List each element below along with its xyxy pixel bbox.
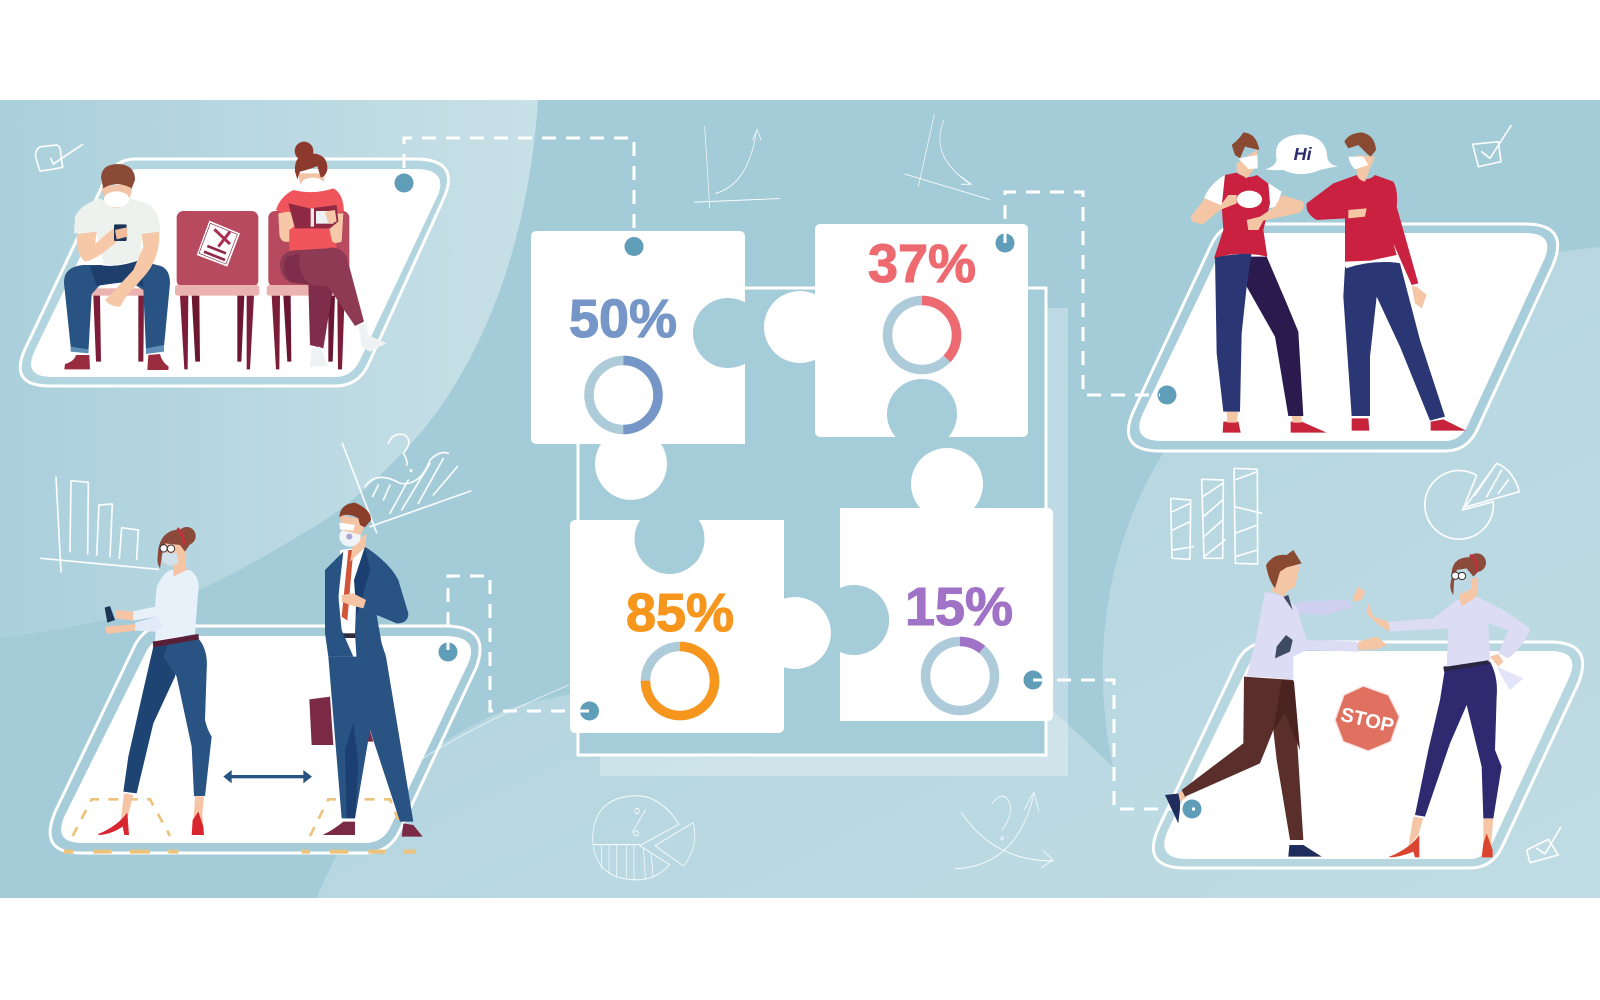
puzzle piece: 85% [570, 520, 831, 733]
dashed connectors [404, 138, 1195, 809]
man in vest [1191, 132, 1327, 433]
thin curve [387, 685, 569, 783]
speech bubble: Hi: Hi [1294, 144, 1313, 164]
stop sign: STOP [1338, 704, 1396, 737]
sketch: hatched bars [1171, 468, 1262, 564]
connector dots on platforms [394, 174, 1202, 818]
sketch: checkbox [1527, 827, 1561, 863]
puzzle piece: 37% [764, 224, 1028, 437]
puzzle piece: 85%: 85% [626, 583, 734, 643]
scene: elbow greeting [1191, 126, 1511, 433]
speech bubble: Hi [1265, 134, 1339, 174]
sketch: checkbox [1473, 126, 1511, 167]
sketch: area chart with question [342, 434, 471, 533]
sketch: bar chart [41, 477, 158, 572]
panel: greeting platform [1128, 224, 1558, 451]
scene: waiting room [35, 142, 387, 370]
sketch: pie chart with percent [593, 796, 695, 880]
puzzle backing frame [578, 288, 1068, 776]
floor markings [64, 799, 416, 852]
stop sign [1335, 686, 1399, 751]
man in sweater [1306, 132, 1466, 431]
panel: distance platform [50, 626, 480, 853]
sketch: crossing arrows with question mark [955, 792, 1053, 869]
man running [1165, 550, 1387, 857]
puzzle piece: 50%: 50% [569, 289, 677, 349]
panel: waiting room platform [20, 159, 448, 386]
seated man with phone [64, 164, 170, 370]
double arrow [223, 770, 312, 783]
chair 1 [92, 288, 144, 362]
sketch: checkbox [35, 144, 83, 171]
background band [0, 100, 1600, 898]
sketch: rising graph [694, 127, 779, 208]
chair 3 [267, 211, 349, 369]
sketch icons around centre [593, 114, 1053, 880]
puzzle piece: 37%: 37% [868, 234, 976, 294]
scene: keep distance [41, 434, 471, 852]
seated woman reading [276, 142, 387, 367]
puzzle piece: 15%: 15% [905, 577, 1013, 637]
woman walking [98, 527, 212, 835]
sketch: falling graph [905, 114, 990, 200]
sketch: pie chart [1425, 463, 1519, 539]
puzzle piece: 50% [531, 231, 745, 500]
man in suit [309, 503, 423, 837]
chair 2 with no-sit sign [175, 211, 259, 369]
scene: stop [1165, 463, 1561, 863]
puzzle piece: 15% [840, 448, 1053, 721]
panel: stop platform [1153, 642, 1583, 868]
woman gesturing stop [1367, 553, 1530, 857]
